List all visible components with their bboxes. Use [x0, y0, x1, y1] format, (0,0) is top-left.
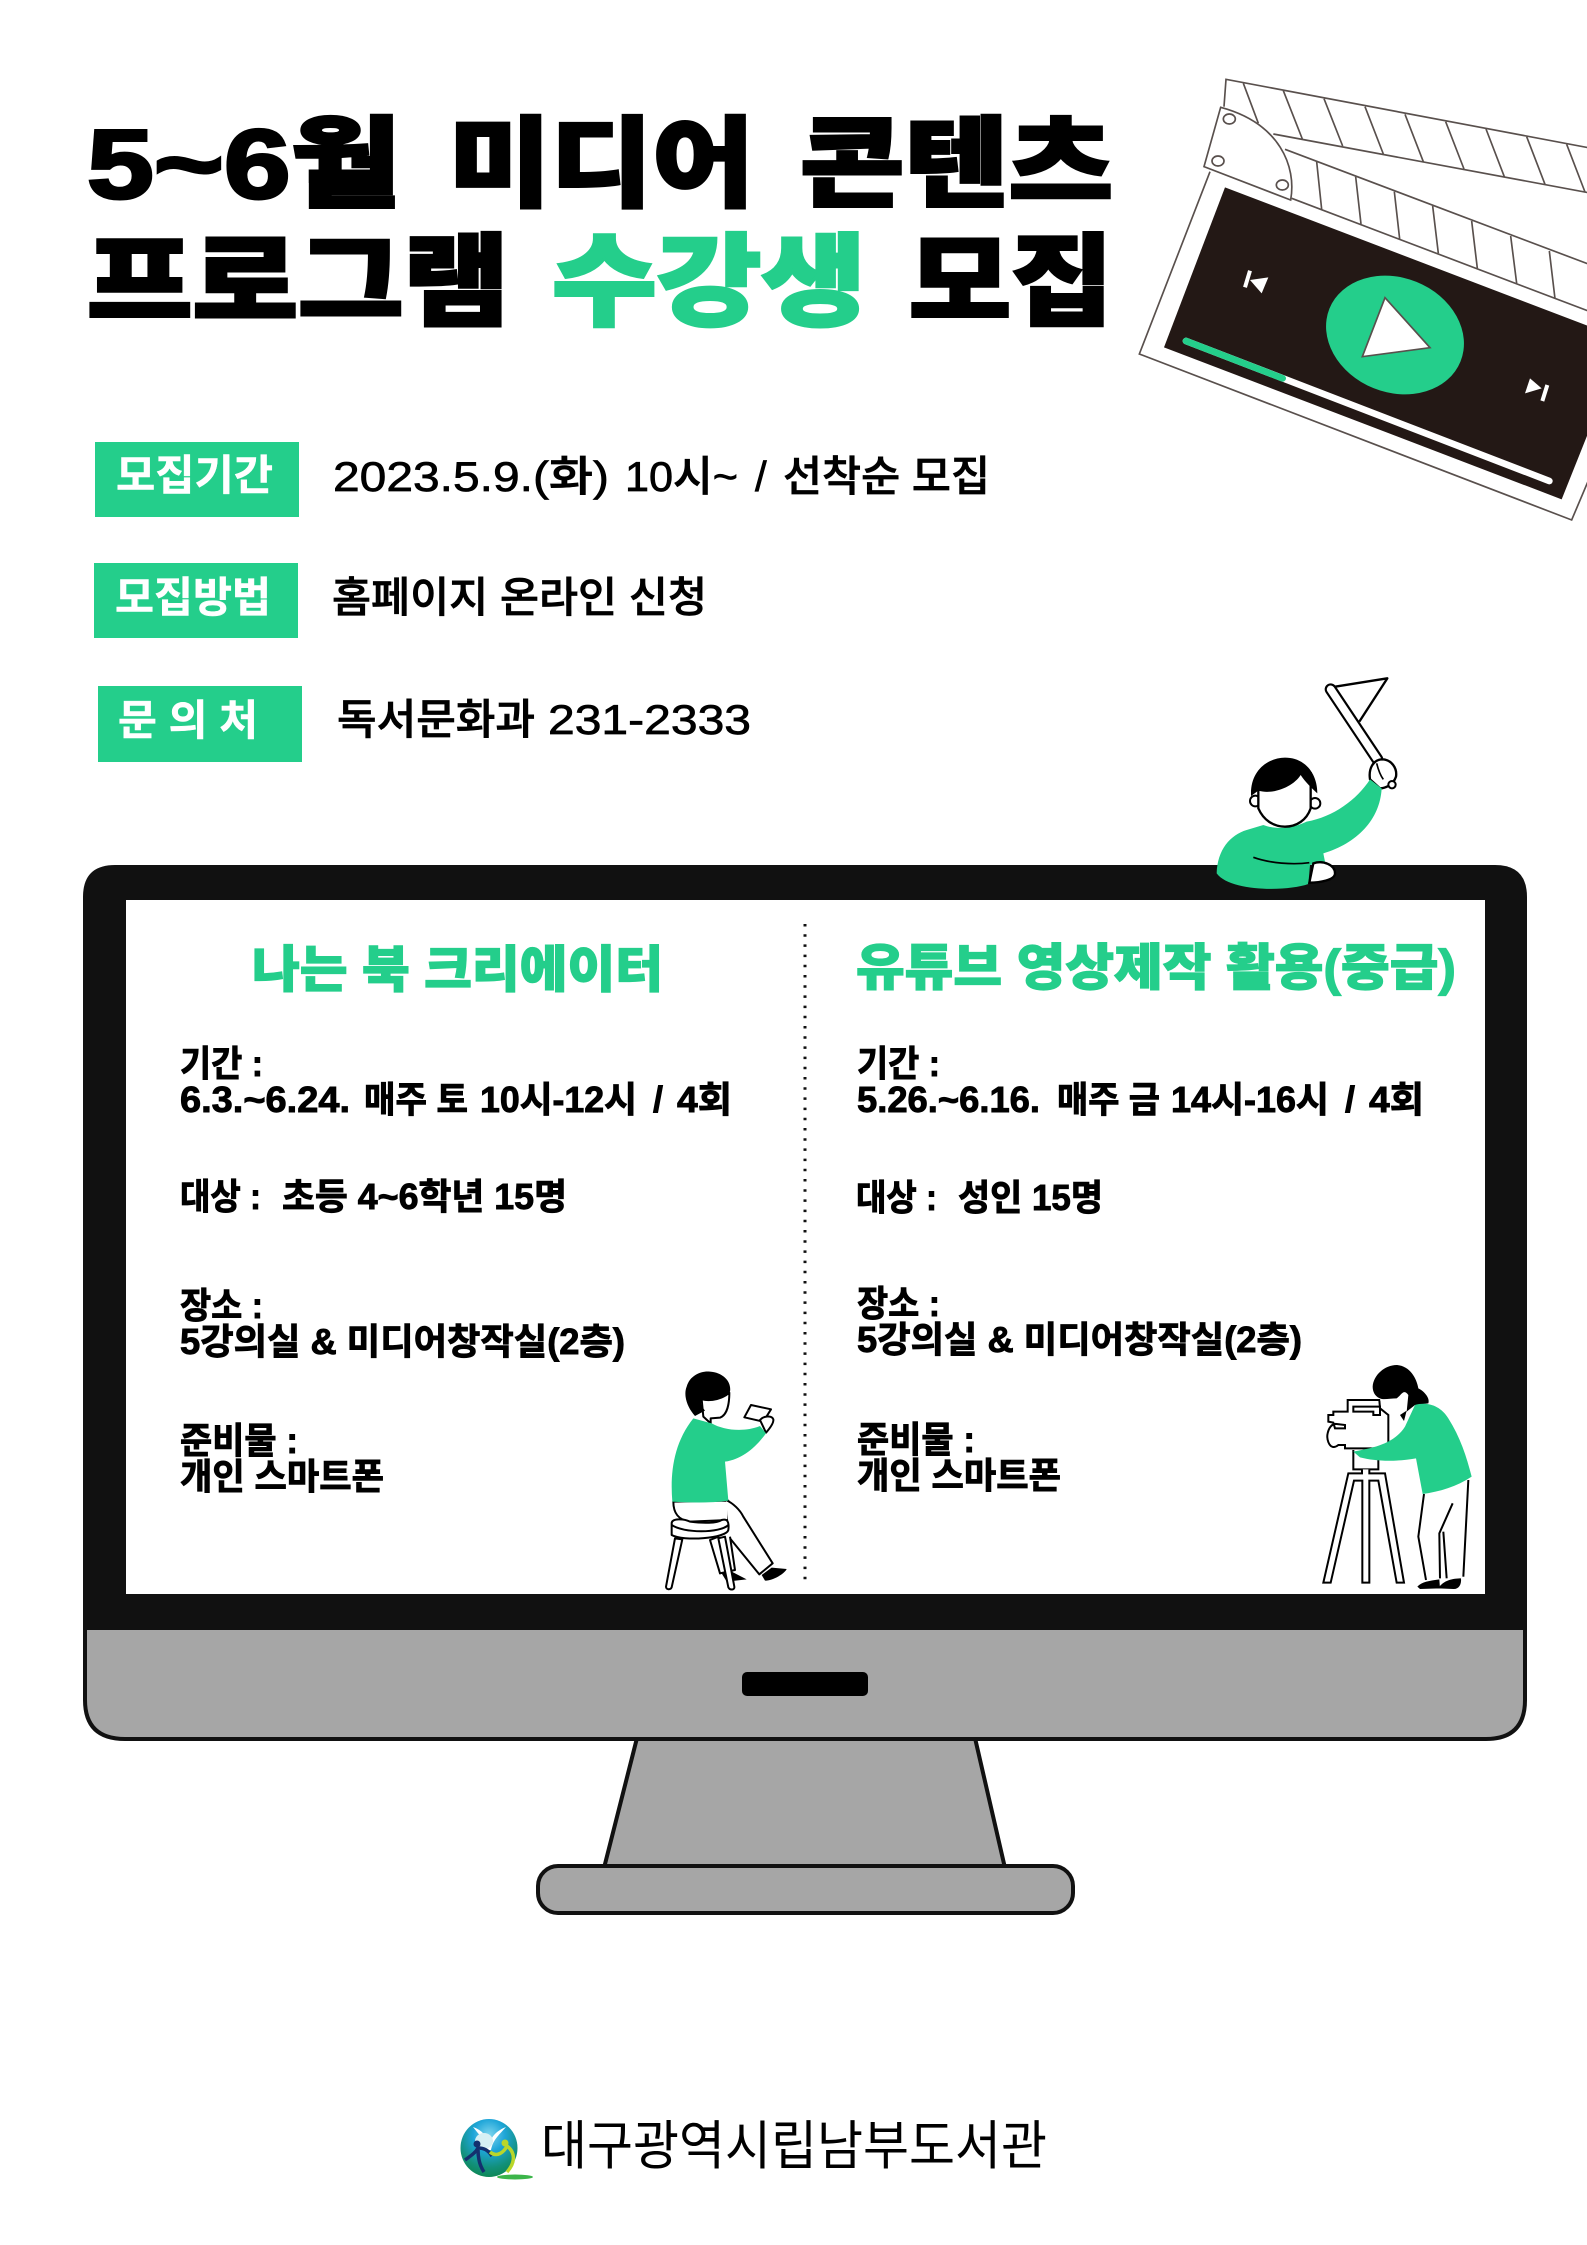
title: 5~6월: [87, 109, 401, 219]
left course details: 4회: [677, 1079, 732, 1120]
left course details: [180, 1043, 732, 1497]
footer: library logo and name: [460, 2117, 1047, 2180]
recruitment period row: 모집기간: [116, 452, 273, 499]
icon: library logo globe: [460, 2119, 533, 2180]
right course details: /: [1345, 1079, 1355, 1120]
contact row: 독서문화과: [337, 696, 535, 743]
right course details: 개인 스마트폰: [857, 1455, 1061, 1496]
recruitment period row: 선착순 모집: [783, 453, 990, 500]
right course details: 장소 :: [857, 1283, 940, 1324]
contact row: 231-2333: [548, 696, 751, 743]
right course details: 14시-16시: [1171, 1079, 1329, 1120]
recruitment period row: 10시~: [625, 453, 738, 500]
contact row: 문 의 처: [118, 697, 258, 744]
right course details: 성인 15명: [958, 1177, 1103, 1218]
left course details: 매주 토: [364, 1079, 468, 1120]
right course details: 5강의실 & 미디어창작실(2층): [857, 1319, 1302, 1360]
left course details: 기간 :: [180, 1043, 263, 1084]
icon: clapperboard with play button: [1139, 79, 1587, 520]
library name: 대구광역시립남부도서관: [541, 2117, 1047, 2176]
right course details: 대상 :: [856, 1177, 937, 1218]
recruitment period row: [95, 442, 990, 517]
title: 모집: [909, 227, 1113, 339]
right course details: 준비물 :: [857, 1419, 975, 1460]
title: 미디어: [449, 109, 754, 219]
left course details: 초등 4~6학년 15명: [282, 1176, 567, 1217]
left course details: 5강의실 & 미디어창작실(2층): [180, 1321, 625, 1362]
right course details: 5.26.~6.16.: [857, 1079, 1040, 1120]
contact row: [98, 686, 751, 762]
right course details: 기간 :: [857, 1043, 940, 1084]
left course details: 6.3.~6.24.: [180, 1079, 350, 1120]
left course details: 개인 스마트폰: [180, 1456, 384, 1497]
left course details: 준비물 :: [180, 1420, 298, 1461]
icon: person waving flag: [1217, 678, 1396, 889]
monitor stand: [604, 1738, 1005, 1868]
application method row: [94, 563, 707, 638]
title: 프로그램: [87, 227, 509, 339]
panel: left course: [180, 942, 732, 1497]
dotted divider: [804, 924, 806, 1582]
left course details: /: [653, 1079, 663, 1120]
left course heading: 나는 북 크리에이터: [252, 942, 663, 998]
left course details: 대상 :: [180, 1176, 261, 1217]
left course details: 장소 :: [180, 1285, 263, 1326]
title: 수강생: [552, 227, 866, 339]
title: [87, 109, 1113, 339]
icon: person filming with tripod camera: [1323, 1365, 1472, 1589]
right course details: 매주 금: [1057, 1079, 1160, 1120]
monitor: [83, 865, 1527, 1913]
recruitment period row: /: [755, 453, 767, 500]
title: 콘텐츠: [800, 109, 1113, 219]
application method row: 홈페이지 온라인 신청: [332, 574, 707, 621]
icon: seated person with smartphone: [666, 1372, 787, 1590]
right course heading: 유튜브 영상제작 활용(중급): [856, 940, 1456, 996]
panel: right course: [856, 940, 1456, 1496]
recruitment period row: 2023.5.9.(화): [333, 453, 609, 500]
left course details: 10시-12시: [480, 1079, 637, 1120]
right course details: [856, 1043, 1424, 1496]
application method row: 모집방법: [115, 574, 271, 621]
right course details: 4회: [1369, 1079, 1424, 1120]
